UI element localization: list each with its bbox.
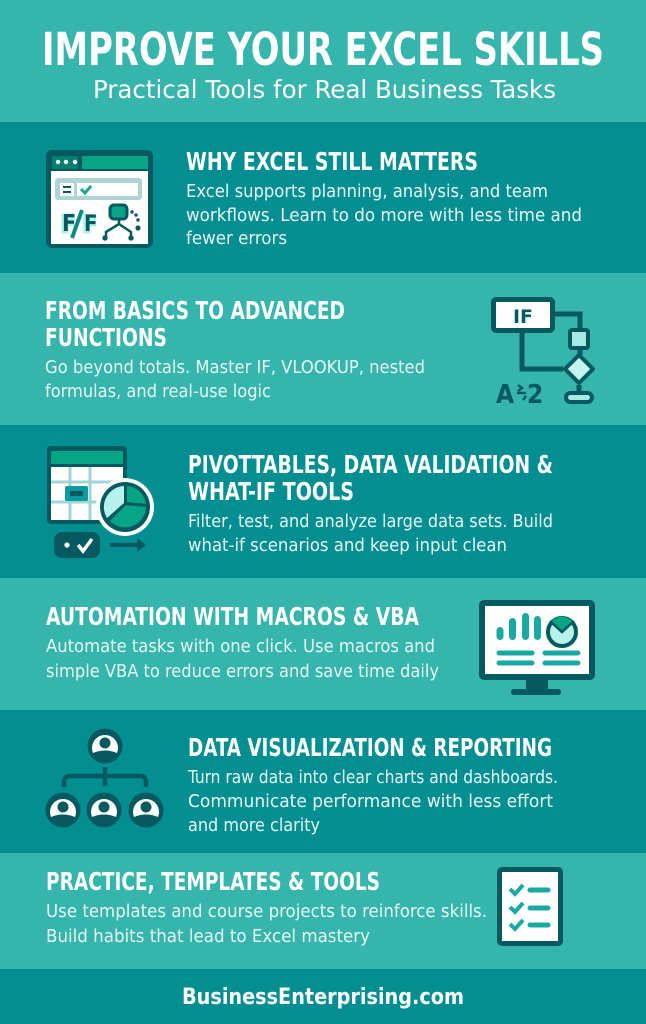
panel: practice, templates and tools [0,853,646,969]
panel: data visualization and reporting [0,710,646,853]
icon: IF flowchart: IF [513,306,533,328]
text block: workflows. Learn to do more with less time and [186,205,582,226]
text block: Use templates and course projects to reinforce skills. [46,901,487,922]
heading: PRACTICE, TEMPLATES & TOOLS [46,867,380,896]
text block [45,357,425,402]
text block: what-if scenarios and keep input clean [188,535,507,556]
heading: WHAT-IF TOOLS [188,477,354,506]
heading: AUTOMATION WITH MACROS & VBA [46,602,419,631]
text block [186,181,582,249]
panel: why excel still matters [0,122,646,273]
heading: DATA VISUALIZATION & REPORTING [188,733,552,762]
icon: spreadsheet window [46,150,153,248]
icon: spreadsheet window: F [61,212,75,238]
panel: from basics to advanced functions [0,273,646,425]
icon: spreadsheet window: F [62,211,76,237]
icon: spreadsheet window: F [84,212,98,237]
text block: Turn raw data into clear charts and dashboards. [187,767,558,788]
icon: IF flowchart: 2 [527,380,543,410]
text block [46,901,487,947]
text block: fewer errors [186,228,287,249]
icon: IF flowchart: A [496,380,514,410]
icon: monitor dashboard [479,600,595,695]
text block: Filter, test, and analyze large data sets. Build [188,511,553,532]
text block: Excel supports planning, analysis, and team [186,181,548,202]
header band [0,0,646,122]
icon: table with pie chart [47,446,154,558]
heading: FROM BASICS TO ADVANCED [45,296,345,325]
footer website: BusinessEnterprising.com [182,985,464,1010]
text block: formulas, and real-use logic [45,381,271,402]
heading [45,296,345,352]
text block: Automate tasks with one click. Use macros and [46,636,435,657]
icon: spreadsheet window: F [83,213,97,238]
panel: automation with macros and vba [0,578,646,710]
text block: Go beyond totals. Master IF, VLOOKUP, nested [45,357,425,378]
text block: simple VBA to reduce errors and save time daily [46,661,439,682]
heading: WHY EXCEL STILL MATTERS [186,147,478,176]
icon: IF flowchart [494,300,593,410]
text block [46,636,439,682]
subtitle: Practical Tools for Real Business Tasks [93,75,556,104]
heading [188,450,553,506]
text block: Communicate performance with less effort [188,791,553,812]
heading: FUNCTIONS [45,323,167,352]
text block: Build habits that lead to Excel mastery [46,926,370,947]
panel: pivottables, data validation and what-if tools [0,425,646,578]
footer band [0,969,646,1024]
icon: people hierarchy [46,728,164,828]
icon: checklist [497,867,563,946]
heading: PIVOTTABLES, DATA VALIDATION & [188,450,553,479]
text block [188,511,553,556]
text block [187,767,558,836]
text block: and more clarity [188,815,320,836]
